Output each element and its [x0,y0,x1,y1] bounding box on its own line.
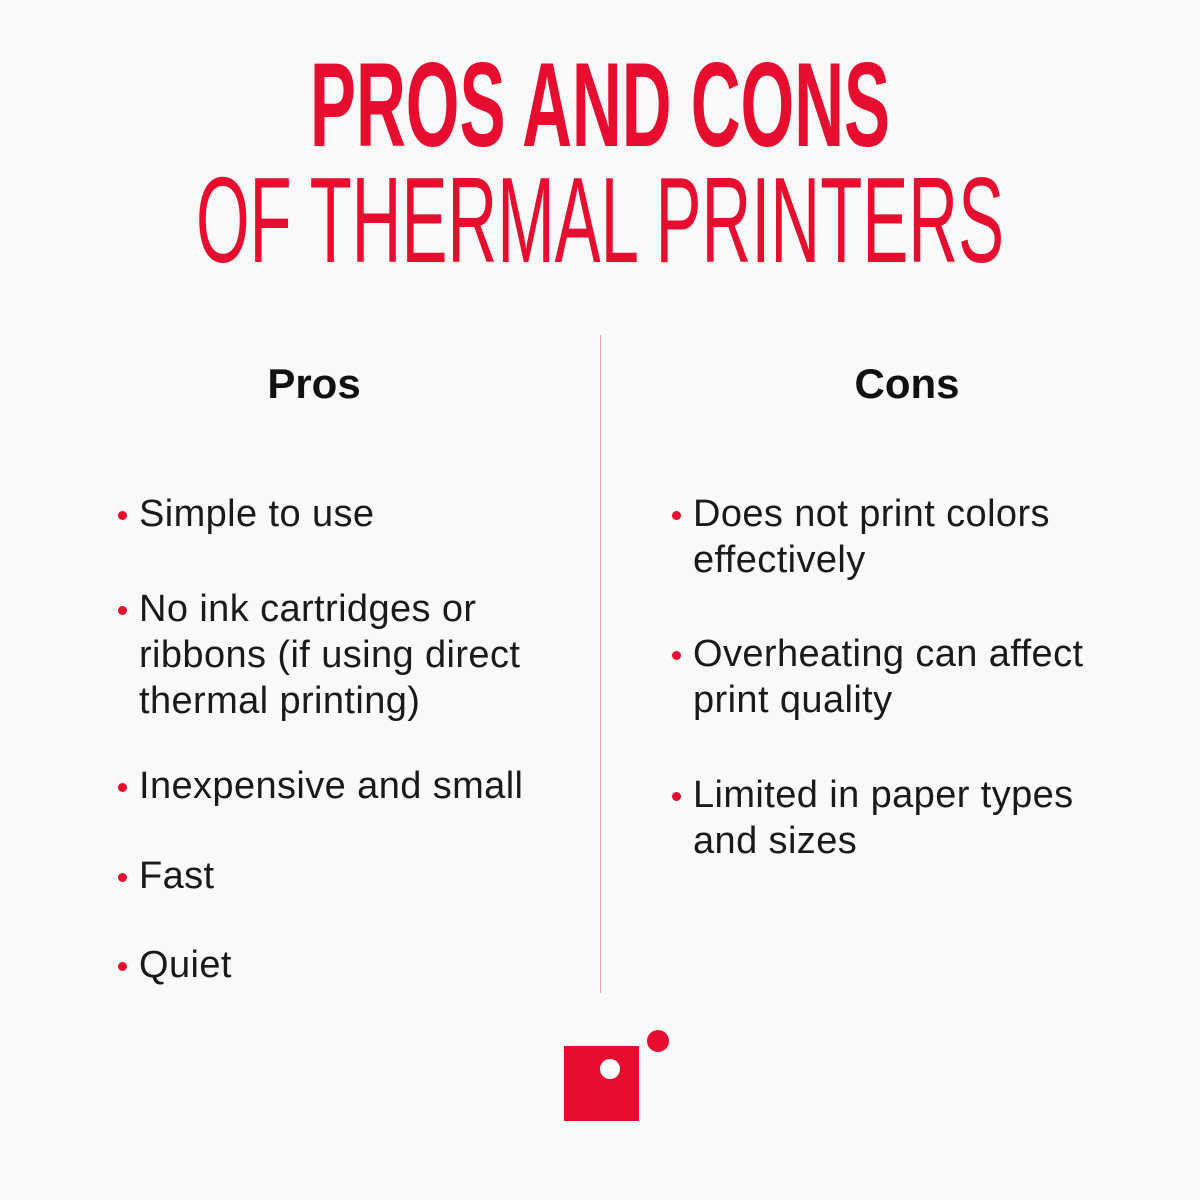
heading: cons: Cons [854,360,960,407]
con item 2 [693,631,1083,723]
pro item 5: Quiet [139,944,232,986]
con item 3: Limited in paper types [693,774,1074,816]
pro item 4: Fast [139,855,215,897]
con item 3: and sizes [693,820,857,862]
title line 1: PROS AND CONS [310,38,890,172]
pro item 2: No ink cartridges or [139,588,476,630]
list: cons [672,493,1083,862]
heading: pros: Pros [267,360,361,407]
title line 2: OF THERMAL PRINTERS [196,152,1004,288]
pro item 1: Simple to use [139,493,374,535]
con item 1: effectively [693,539,866,581]
pro item 2: ribbons (if using direct [139,634,520,676]
con item 2: print quality [693,679,893,721]
con item 1: Does not print colors [693,493,1050,535]
title [196,38,1004,288]
logo [564,1030,669,1121]
pro item 2: thermal printing) [139,680,420,722]
pro item 2 [139,586,520,724]
divider [600,335,601,993]
con item 1 [693,491,1050,583]
list: pros [118,493,523,986]
con item 3 [693,772,1074,864]
con item 2: Overheating can affect [693,633,1083,675]
pro item 3: Inexpensive and small [139,765,523,807]
